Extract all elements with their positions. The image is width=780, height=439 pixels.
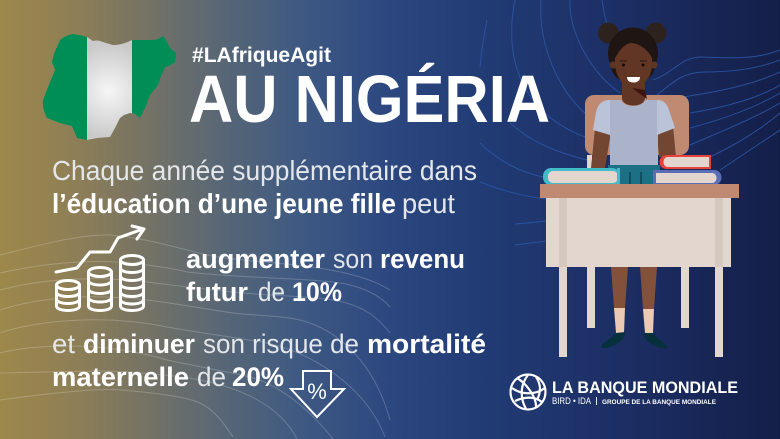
- icon: percent down arrow: %: [307, 379, 327, 404]
- intro text: peut: [402, 188, 455, 219]
- text: maternal mortality: 20%: [232, 362, 284, 392]
- illustration: girl at desk: [540, 22, 739, 357]
- logo: World Bank: GROUPE DE LA BANQUE MONDIALE: [602, 399, 717, 406]
- intro text: [52, 155, 477, 219]
- hair buns: [598, 22, 619, 44]
- girl legs: [611, 267, 628, 308]
- text: income: futur: [186, 277, 248, 307]
- text: maternal mortality: de: [197, 362, 226, 392]
- shoes: [601, 332, 625, 348]
- neck: [622, 82, 645, 106]
- text: income: 10%: [292, 277, 342, 307]
- hair: [608, 28, 658, 78]
- contour lines: right: [480, 0, 780, 245]
- title: AU NIGÉRIA: [189, 62, 550, 137]
- text: maternal mortality: diminuer: [83, 329, 195, 359]
- icon: coins and rising arrow: [56, 226, 144, 310]
- contour lines: lower left: [0, 235, 390, 439]
- icon: Nigeria flag map: [40, 30, 180, 142]
- desk front legs: [559, 267, 567, 357]
- text: maternal mortality: [52, 329, 486, 392]
- book: teal: [543, 168, 620, 186]
- text: maternal mortality: son risque de: [203, 329, 359, 359]
- ears: [610, 62, 616, 68]
- desk panel: [546, 198, 731, 267]
- text: income: revenu: [380, 244, 465, 274]
- intro text: Chaque année supplémentaire dans: [52, 155, 477, 186]
- text: maternal mortality: mortalité: [367, 329, 486, 359]
- text: income: augmenter: [186, 244, 325, 274]
- desk top: [540, 184, 739, 198]
- text: income: son: [333, 244, 373, 274]
- eyes: [622, 64, 625, 66]
- hashtag: #LAfriqueAgit: [192, 44, 331, 67]
- icon: globe: [510, 374, 546, 410]
- text: income: [186, 244, 465, 307]
- logo subtitle: BIRD • IDA: [552, 396, 591, 406]
- logo name: LA BANQUE MONDIALE: [552, 378, 738, 397]
- skirt: [608, 165, 660, 184]
- text: maternal mortality: maternelle: [52, 362, 189, 392]
- shirt: [610, 100, 658, 165]
- arms: [591, 128, 611, 168]
- book: red: [660, 155, 711, 169]
- smile: [627, 77, 640, 82]
- logo: World Bank: [510, 374, 738, 410]
- intro text: l’éducation d’une jeune fille: [52, 188, 396, 219]
- icon: percent down arrow: [291, 371, 344, 417]
- chair: [585, 95, 689, 155]
- text: maternal mortality: et: [52, 329, 75, 359]
- book: blue: [653, 170, 722, 185]
- face: [615, 43, 652, 87]
- text: income: de: [258, 277, 285, 307]
- desk legs back: [587, 267, 595, 328]
